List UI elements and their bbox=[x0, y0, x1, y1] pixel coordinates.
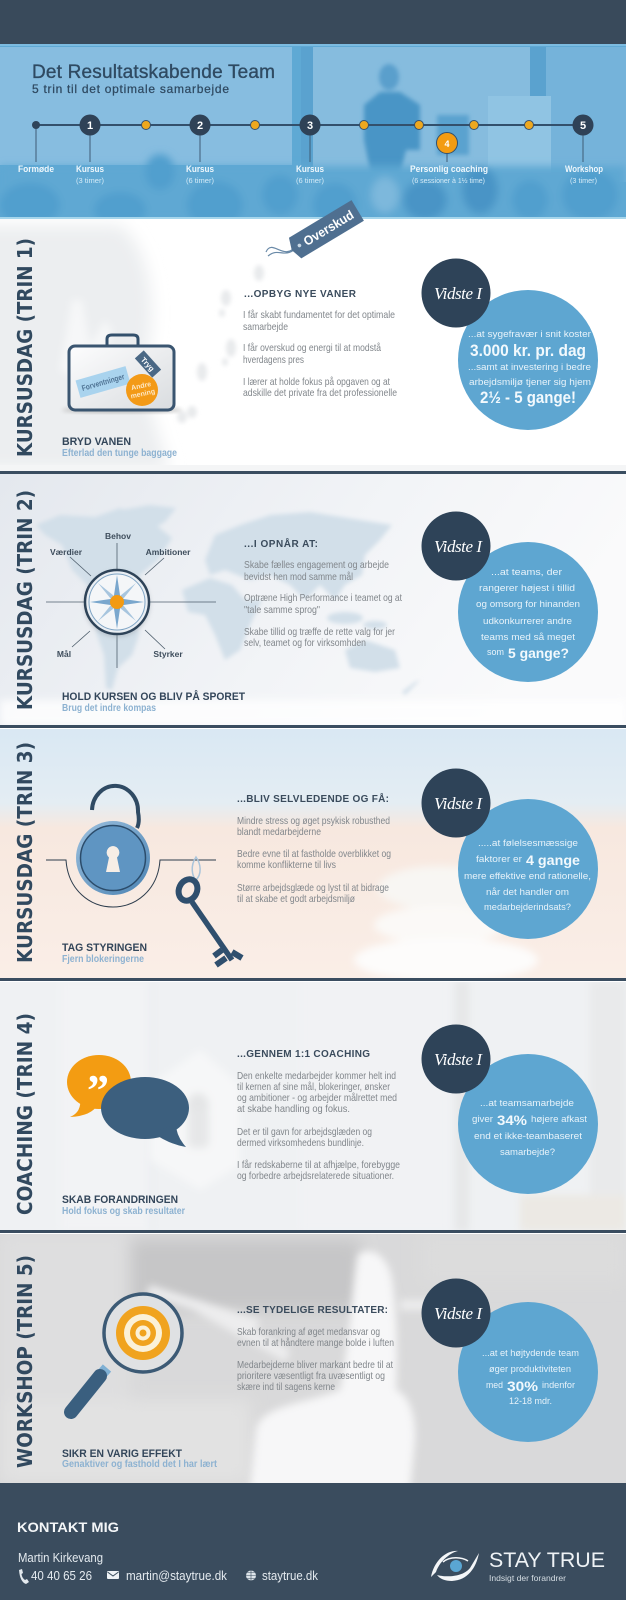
caption: Hold fokus og skab resultater bbox=[62, 1206, 185, 1217]
caption: Efterlad den tunge baggage bbox=[62, 448, 177, 459]
icon: overskud tag bbox=[266, 200, 364, 260]
callout: vidste i: faktorer er bbox=[476, 854, 522, 865]
logo: stay true: Indsigt der forandrer bbox=[489, 1573, 566, 1583]
callout: vidste i: samarbejde? bbox=[500, 1147, 555, 1158]
callout: vidste i: 4 gange bbox=[526, 852, 580, 868]
caption: SKAB FORANDRINGEN bbox=[62, 1194, 178, 1206]
body text: ...I OPNÅR AT: bbox=[244, 537, 318, 550]
body text: komme konflikterne til livs bbox=[237, 859, 336, 871]
timeline: 2 bbox=[197, 120, 203, 132]
callout: vidste i: højere afkast bbox=[531, 1114, 587, 1125]
timeline bbox=[32, 114, 594, 162]
callout: vidste i: øger produktiviteten bbox=[489, 1364, 571, 1375]
callout: vidste i: ...at teamsamarbejde bbox=[480, 1098, 574, 1109]
timeline labels: Kursus bbox=[296, 164, 324, 175]
callout: vidste i: mere effektive end rationelle, bbox=[464, 871, 591, 882]
compass labels bbox=[50, 531, 191, 659]
body text: Medarbejderne bliver markant bedre til at bbox=[237, 1359, 393, 1371]
body text: Det er til gavn for arbejdsglæden og bbox=[237, 1126, 372, 1138]
body text: Skab forankring af øget medansvar og bbox=[237, 1326, 380, 1338]
timeline: 3 bbox=[307, 120, 313, 132]
icon: suitcase: Andre bbox=[131, 381, 152, 392]
callout: vidste i: Vidste I bbox=[434, 284, 483, 303]
hero panel: timeline on photo bbox=[0, 44, 626, 229]
caption: Brug det indre kompas bbox=[62, 703, 156, 714]
body text: I lærer at holde fokus på opgaven og at bbox=[243, 376, 390, 388]
callout: vidste i: arbejdsmiljø tjener sig hjem bbox=[469, 377, 591, 388]
body text: bevidst hen mod samme mål bbox=[244, 571, 353, 583]
callout: vidste i: Vidste I bbox=[434, 1304, 483, 1323]
panel: workshop trin 5 bbox=[0, 1233, 626, 1490]
body text: Skabe tillid og træffe de rette valg for jer bbox=[244, 626, 395, 638]
timeline labels: (6 timer) bbox=[296, 176, 324, 185]
timeline labels: Kursus bbox=[186, 164, 214, 175]
callout: vidste i: 12-18 mdr. bbox=[509, 1396, 552, 1407]
timeline: 4 bbox=[444, 139, 450, 149]
compass labels: Styrker bbox=[153, 649, 183, 659]
icon: compass bbox=[46, 543, 216, 668]
panel: kursusdag trin 1 bbox=[0, 200, 626, 471]
timeline labels bbox=[18, 164, 603, 185]
caption bbox=[62, 942, 147, 965]
callout: vidste i: .....at følelsesmæssige bbox=[478, 838, 578, 849]
icon: open padlock with key bbox=[46, 786, 242, 965]
panel: kursusdag trin 3 bbox=[0, 728, 626, 982]
email: martin@staytrue.dk bbox=[126, 1569, 228, 1583]
callout: vidste i: end et ikke-teambaseret bbox=[474, 1131, 582, 1142]
timeline labels: Workshop bbox=[565, 164, 603, 175]
divider bbox=[0, 978, 626, 981]
timeline: 5 bbox=[580, 120, 586, 132]
background keyhole shape bbox=[190, 1097, 206, 1144]
body text: til at skabe et godt arbejdsmiljø bbox=[237, 893, 355, 905]
divider bbox=[0, 1230, 626, 1233]
icon: globe bbox=[246, 1570, 256, 1580]
icon: footsteps bbox=[177, 265, 264, 423]
body text: Større arbejdsglæde og lyst til at bidrage bbox=[237, 882, 389, 894]
logo: stay true bbox=[431, 1549, 605, 1583]
callout: vidste i: teams med så meget bbox=[481, 632, 575, 643]
caption bbox=[62, 1194, 185, 1217]
body text: skære ind til sagens kerne bbox=[237, 1381, 335, 1393]
caption bbox=[62, 1448, 218, 1470]
body text bbox=[237, 1049, 400, 1182]
callout: vidste i: Vidste I bbox=[434, 1050, 483, 1069]
icon: speech bubbles bbox=[67, 1055, 189, 1147]
icon: mail bbox=[107, 1571, 119, 1579]
icon: phone bbox=[19, 1569, 29, 1584]
callout: vidste i: 5 gange? bbox=[508, 645, 569, 661]
callout: vidste i: 2½ - 5 gange! bbox=[480, 388, 576, 407]
body text: ...SE TYDELIGE RESULTATER: bbox=[237, 1305, 388, 1316]
body text: Optræne High Performance i teamet og at bbox=[244, 592, 402, 604]
callout: vidste i bbox=[422, 512, 598, 682]
timeline labels: (6 sessioner à 1½ time) bbox=[412, 176, 485, 185]
body text: Skabe fælles engagement og arbejde bbox=[244, 559, 389, 571]
callout: vidste i: 34% bbox=[497, 1112, 528, 1128]
body text: at skabe handling og fokus. bbox=[237, 1103, 350, 1115]
timeline: 1 bbox=[87, 120, 93, 132]
subtitle: 5 trin til det optimale samarbejde bbox=[32, 82, 229, 96]
callout: vidste i: indenfor bbox=[542, 1380, 575, 1391]
caption: TAG STYRINGEN bbox=[62, 942, 147, 954]
body text bbox=[237, 1305, 394, 1393]
callout: vidste i: når det handler om bbox=[486, 887, 569, 898]
timeline labels: Kursus bbox=[76, 164, 104, 175]
callout: vidste i bbox=[422, 1024, 598, 1194]
vertical heading: WORKSHOP (TRIN 5) bbox=[13, 1255, 37, 1468]
body text: ...GENNEM 1:1 COACHING bbox=[237, 1049, 370, 1060]
compass labels: Behov bbox=[105, 531, 131, 541]
caption: BRYD VANEN bbox=[62, 436, 131, 448]
body text: "tale samme sprog" bbox=[244, 604, 320, 616]
body text: blandt medarbejderne bbox=[237, 826, 321, 838]
body text: samarbejde bbox=[243, 321, 288, 333]
body text: til kernen af sine mål, blokeringer, ønsker bbox=[237, 1081, 390, 1093]
contact heading: KONTAKT MIG bbox=[17, 1519, 119, 1535]
timeline labels: Personlig coaching bbox=[410, 164, 488, 175]
section 2 background with world map bbox=[0, 474, 626, 726]
section 4 background wood bbox=[0, 981, 626, 1231]
panel: coaching trin 4 bbox=[0, 981, 626, 1231]
callout: vidste i: medarbejderindsats? bbox=[484, 902, 571, 913]
vertical heading: KURSUSDAG (TRIN 1) bbox=[13, 238, 37, 457]
icon: suitcase: Tryg bbox=[139, 355, 157, 374]
hero background photo bbox=[0, 44, 626, 229]
section 3 background with stones bbox=[0, 728, 626, 982]
callout: vidste i: Vidste I bbox=[434, 537, 483, 556]
body text: prioritere væsentligt fra uvæsentligt og bbox=[237, 1370, 385, 1382]
icon: magnifier and target bbox=[71, 1294, 182, 1412]
callout: vidste i: Vidste I bbox=[434, 794, 483, 813]
body text: dermed virksomhedens bundlinje. bbox=[237, 1137, 364, 1149]
icon: suitcase: Forventninger bbox=[81, 372, 126, 393]
caption: Fjern blokeringerne bbox=[62, 954, 144, 965]
callout: vidste i: som bbox=[487, 647, 504, 658]
body text: Bedre evne til at fastholde overblikket og bbox=[237, 848, 391, 860]
header bar bbox=[0, 0, 626, 44]
compass labels: Ambitioner bbox=[146, 547, 191, 557]
body text: Mindre stress og øget psykisk robusthed bbox=[237, 815, 390, 827]
caption bbox=[62, 436, 177, 459]
body text bbox=[237, 792, 391, 905]
vertical heading: KURSUSDAG (TRIN 3) bbox=[13, 742, 37, 963]
caption bbox=[62, 690, 245, 714]
body text: ...OPBYG NYE VANER bbox=[244, 289, 357, 300]
website: staytrue.dk bbox=[262, 1569, 319, 1583]
body text: Den enkelte medarbejder kommer helt ind bbox=[237, 1070, 396, 1082]
contact name: Martin Kirkevang bbox=[18, 1551, 103, 1565]
divider bbox=[0, 471, 626, 474]
icon: speech bubbles: ” bbox=[87, 1066, 109, 1115]
callout: vidste i: udkonkurrerer andre bbox=[483, 616, 572, 627]
body text: selv, teamet og for virksomhden bbox=[244, 637, 366, 649]
callout: vidste i: 3.000 kr. pr. dag bbox=[470, 341, 586, 360]
body text: ...BLIV SELVLEDENDE OG FÅ: bbox=[237, 792, 389, 805]
callout: vidste i: ...at teams, der bbox=[491, 567, 562, 578]
section 1 background bbox=[0, 219, 626, 471]
section 5 background thumbs up bbox=[0, 1233, 626, 1490]
callout: vidste i: ...samt at investering i bedre bbox=[468, 362, 591, 373]
phone number: 40 40 65 26 bbox=[31, 1569, 92, 1583]
footer panel bbox=[0, 1483, 626, 1600]
timeline labels: Formøde bbox=[18, 164, 54, 175]
divider bbox=[0, 725, 626, 728]
callout: vidste i bbox=[422, 1278, 598, 1442]
callout: vidste i bbox=[422, 768, 598, 939]
body text bbox=[243, 289, 397, 399]
icon: overskud tag: Overskud bbox=[301, 207, 356, 249]
callout: vidste i: ...at sygefravær i snit koster bbox=[468, 329, 591, 340]
logo: stay true: STAY TRUE bbox=[489, 1549, 605, 1572]
caption: HOLD KURSEN OG BLIV PÅ SPORET bbox=[62, 690, 245, 703]
callout: vidste i: giver bbox=[472, 1114, 493, 1125]
body text: hverdagens pres bbox=[243, 354, 304, 366]
callout: vidste i: ...at et højtydende team bbox=[482, 1348, 579, 1359]
body text: I får skabt fundamentet for det optimale bbox=[243, 309, 395, 321]
timeline labels: (3 timer) bbox=[76, 176, 104, 185]
caption: SIKR EN VARIG EFFEKT bbox=[62, 1448, 182, 1460]
icon: suitcase bbox=[62, 335, 182, 413]
body text: adskille det private fra det professionelle bbox=[243, 387, 397, 399]
vertical heading: COACHING (TRIN 4) bbox=[13, 1013, 37, 1215]
body text: og forbedre arbejdsrelaterede situationer. bbox=[237, 1170, 394, 1182]
body text: og ambitioner - og arbejder målrettet med bbox=[237, 1092, 397, 1104]
compass labels: Mål bbox=[57, 649, 71, 659]
icon: suitcase: mening bbox=[130, 388, 156, 400]
body text: evnen til at håndtere mange bolde i luften bbox=[237, 1337, 394, 1349]
timeline labels: (3 timer) bbox=[570, 176, 597, 185]
body text: I får overskud og energi til at modstå bbox=[243, 342, 381, 354]
title: Det Resultatskabende Team bbox=[32, 62, 275, 83]
callout: vidste i: med bbox=[486, 1380, 503, 1391]
vertical heading: KURSUSDAG (TRIN 2) bbox=[13, 490, 37, 710]
panel: kursusdag trin 2 bbox=[0, 474, 626, 726]
callout: vidste i: og omsorg for hinanden bbox=[476, 599, 580, 610]
callout: vidste i: rangerer højest i tillid bbox=[479, 583, 575, 594]
body text bbox=[244, 537, 402, 649]
callout: vidste i: 30% bbox=[507, 1378, 539, 1394]
caption: Genaktiver og fasthold det I har lært bbox=[62, 1459, 218, 1470]
callout: vidste i bbox=[422, 258, 598, 430]
compass labels: Værdier bbox=[50, 547, 83, 557]
timeline labels: (6 timer) bbox=[186, 176, 214, 185]
body text: I får redskaberne til at afhjælpe, forebygge bbox=[237, 1159, 400, 1171]
